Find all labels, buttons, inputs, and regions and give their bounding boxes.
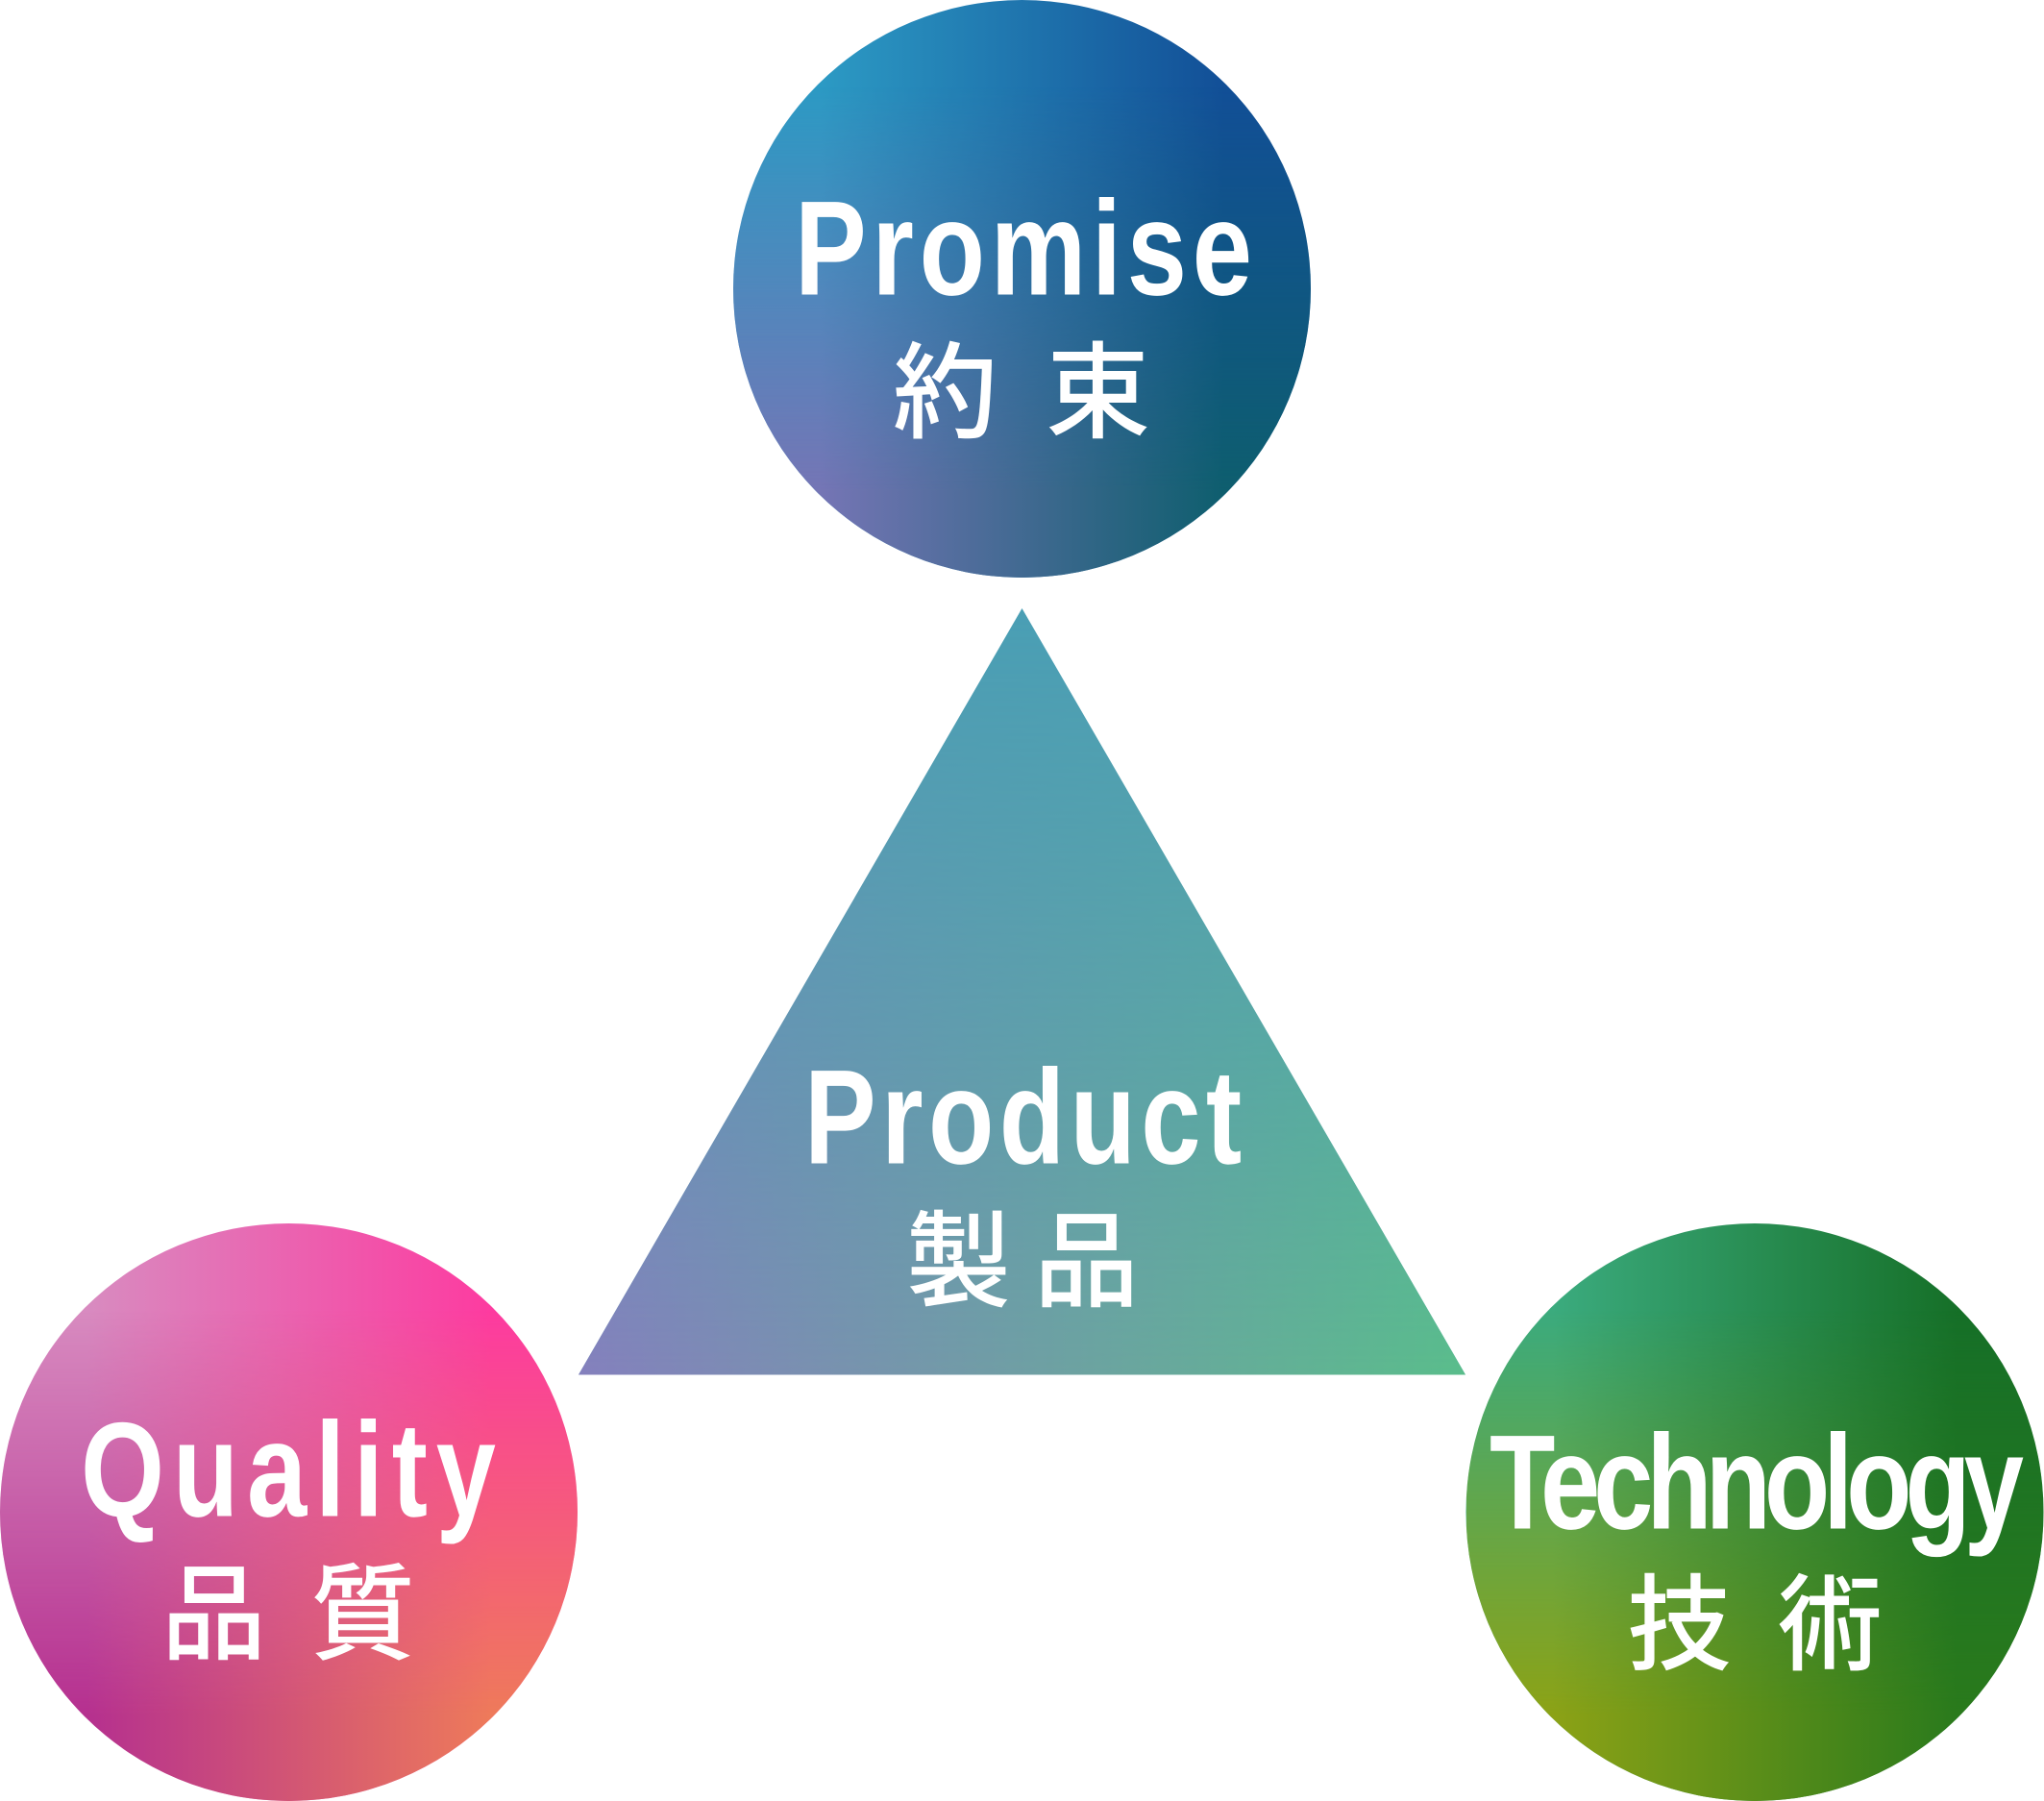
heading: Product: Product (804, 1042, 1242, 1192)
panel: Technology circle (1466, 1223, 2043, 1801)
heading: Promise: Promise (795, 173, 1252, 323)
circle: Quality gradient background (0, 1223, 578, 1801)
circle: Technology gradient background (1466, 1223, 2043, 1801)
label: 約束: 約束 (893, 335, 1198, 453)
panel: Quality circle (0, 1223, 578, 1801)
heading: Quality: Quality (81, 1394, 496, 1544)
label: 製品: 製品 (906, 1204, 1162, 1321)
label: 品質: 品質 (161, 1557, 459, 1674)
label: 技術: 技術 (1627, 1567, 1929, 1685)
panel: Promise circle (733, 0, 1311, 578)
circle: Promise gradient background (733, 0, 1311, 578)
triangle: Product gradient background (579, 608, 1465, 1374)
panel: Product triangle (579, 608, 1465, 1374)
heading: Technology: Technology (1490, 1407, 2024, 1557)
